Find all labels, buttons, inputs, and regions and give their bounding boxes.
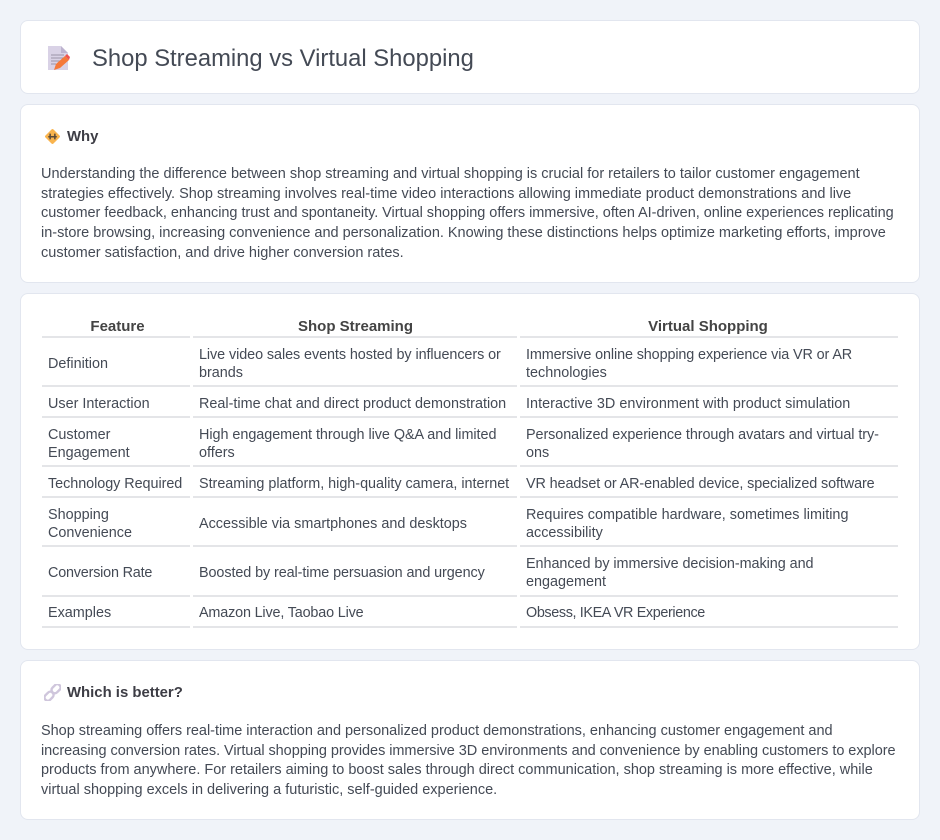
text: why paragraph: in-store browsing, increasing convenience and personalization. Knowing these distinctions helps optimize marketing efforts, improve: [41, 225, 886, 241]
text: which paragraph: virtual shopping excels in delivering a futuristic, self-guided experience.: [41, 782, 497, 798]
table row: customer engagement: Personalized experience through avatars and virtual try-: [526, 427, 879, 443]
table row: conversion rate: Boosted by real-time persuasion and urgency: [199, 565, 485, 581]
text: why paragraph: customer feedback, enhancing trust and spontaneity. Virtual shopping offers immersive, often AI-driven, online experiences replicating: [41, 205, 894, 221]
table row: conversion rate: Conversion Rate: [48, 565, 152, 581]
table header: Virtual Shopping: [648, 318, 768, 335]
icon: document with pencil: [48, 46, 70, 70]
text: which paragraph: [41, 723, 896, 798]
table row: customer engagement: Engagement: [48, 445, 130, 461]
table row: customer engagement: offers: [199, 445, 235, 461]
table row: user interaction: [42, 396, 898, 418]
panel: header: [20, 20, 920, 94]
table row: technology required: Technology Required: [48, 476, 182, 492]
panel: why: [20, 104, 920, 283]
table row: customer engagement: Customer: [48, 427, 110, 443]
table row: shopping convenience: [42, 507, 898, 547]
table row: user interaction: Real-time chat and direct product demonstration: [199, 396, 506, 412]
table row: conversion rate: [42, 556, 898, 597]
text: which paragraph: Shop streaming offers real-time interaction and personalized product demonstrations, enhancing customer engagement and: [41, 723, 833, 739]
table row: technology required: VR headset or AR-enabled device, specialized software: [526, 476, 875, 492]
table row: examples: Amazon Live, Taobao Live: [199, 605, 363, 621]
table row: examples: Examples: [48, 605, 111, 621]
table row: shopping convenience: Requires compatible hardware, sometimes limiting: [526, 507, 848, 523]
table row: shopping convenience: Shopping: [48, 507, 109, 523]
text: which paragraph: products from anywhere. For retailers aiming to boost sales through direct communication, shop streaming is more effective, while: [41, 762, 873, 778]
table row: definition: Definition: [48, 356, 108, 372]
text: why paragraph: [41, 166, 894, 261]
table row: definition: [42, 347, 898, 387]
table row: shopping convenience: accessibility: [526, 525, 603, 541]
table row: examples: [42, 605, 898, 628]
heading: which is better: Which is better?: [67, 685, 183, 701]
table row: customer engagement: [42, 427, 898, 467]
table row: technology required: Streaming platform, high-quality camera, internet: [199, 476, 509, 492]
icon: chain link: [44, 684, 61, 701]
table row: definition: technologies: [526, 365, 607, 381]
table header: Shop Streaming: [298, 318, 413, 335]
table row: definition: Immersive online shopping experience via VR or AR: [526, 347, 852, 363]
table row: user interaction: User Interaction: [48, 396, 150, 412]
table row: definition: brands: [199, 365, 243, 381]
text: why paragraph: Understanding the difference between shop streaming and virtual shopping is crucial for retailers to tailor customer engagement: [41, 166, 860, 182]
table row: customer engagement: High engagement through live Q&A and limited: [199, 427, 496, 443]
table row: definition: Live video sales events hosted by influencers or: [199, 347, 501, 363]
table row: conversion rate: Enhanced by immersive decision-making and: [526, 556, 814, 572]
icon: diamond warning: [45, 129, 60, 144]
panel: which is better: [20, 660, 920, 820]
heading: why: Why: [67, 129, 98, 145]
table row: user interaction: Interactive 3D environment with product simulation: [526, 396, 850, 412]
text: which paragraph: increasing conversion rates. Virtual shopping provides immersive 3D environments and convenience by enabling customers to explore: [41, 743, 896, 759]
text: why paragraph: customer satisfaction, and drive higher conversion rates.: [41, 245, 404, 261]
title: Shop Streaming vs Virtual Shopping: [92, 45, 474, 72]
panel: comparison table: [20, 293, 920, 650]
table row: shopping convenience: Accessible via smartphones and desktops: [199, 516, 467, 532]
table header: [42, 318, 898, 338]
text: why paragraph: strategies effectively. Shop streaming involves real-time video interactions allowing immediate product demonstrations and live: [41, 186, 851, 202]
table row: shopping convenience: Convenience: [48, 525, 132, 541]
table row: examples: Obsess, IKEA VR Experience: [526, 605, 705, 621]
table row: technology required: [42, 476, 898, 498]
table header: Feature: [90, 318, 145, 335]
table row: conversion rate: engagement: [526, 574, 606, 590]
table row: customer engagement: ons: [526, 445, 549, 461]
